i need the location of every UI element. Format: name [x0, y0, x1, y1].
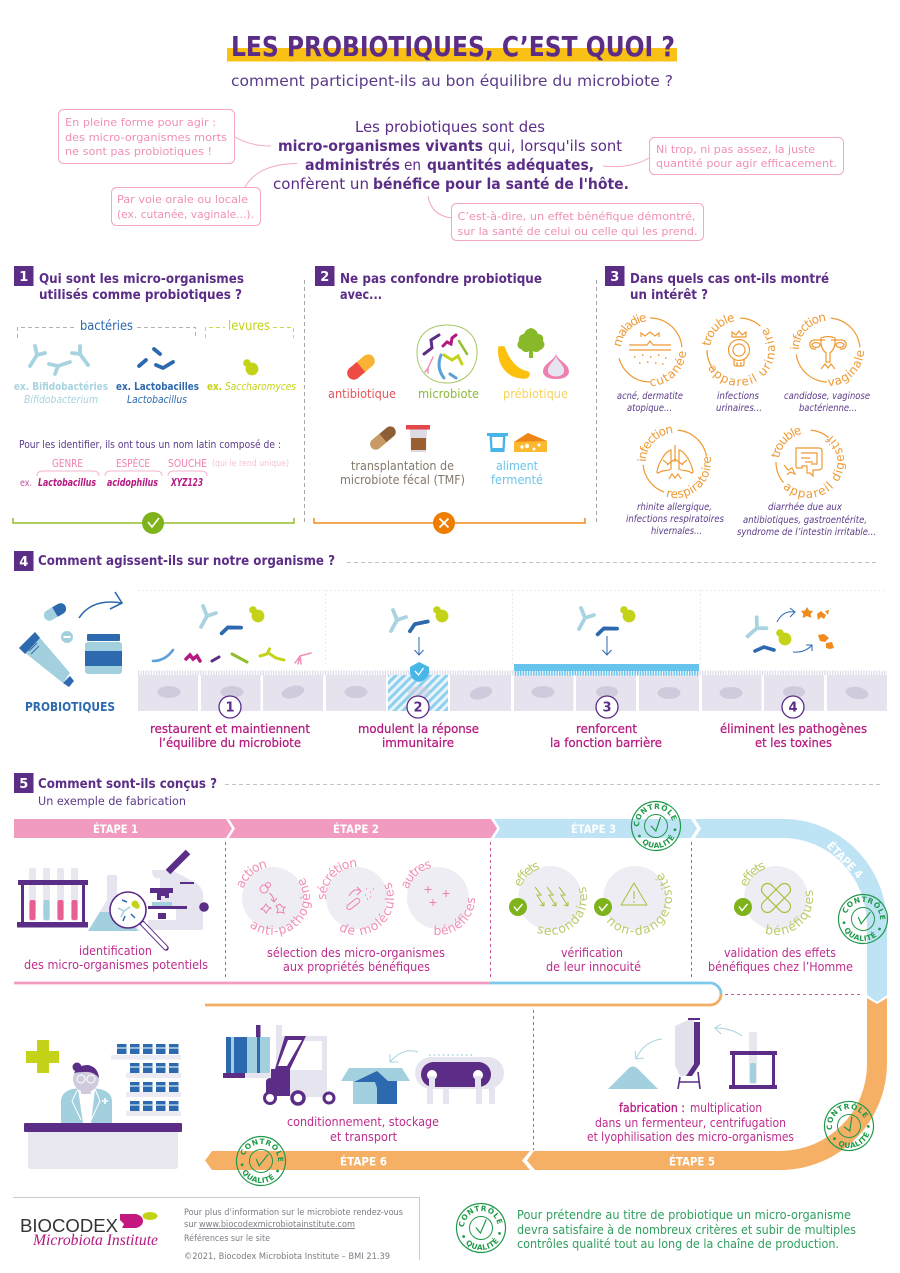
heading 4 [14, 551, 879, 571]
badge: trouble appareil digestif: appareil digestif [784, 436, 846, 500]
label: aliment fermenté: fermenté [491, 472, 543, 487]
text: nom latin: acidophilus [107, 477, 158, 489]
band: étape 2 [229, 819, 497, 838]
badge: trouble appareil urinaire: trouble [702, 314, 734, 345]
logo: Biocodex Microbiota Institute: Microbiota Institute [32, 1232, 158, 1249]
circle: effets bénéfiques: bénéfiques [766, 890, 814, 936]
text: étape 5: et lyophilisation des micro-organismes [587, 1130, 794, 1144]
icon: bifidobactéries [30, 346, 88, 374]
band: étape 6 [205, 1151, 530, 1170]
stamp: contrôle qualité étape 3 [630, 800, 682, 852]
heading 5 [14, 773, 882, 808]
text: nom latin: (qui le rend unique) [212, 459, 289, 469]
caption: infection respiratoire: hivernales... [651, 526, 702, 537]
stamp: contrôle qualité étape 6: QUALITÉ [242, 1170, 274, 1184]
caption: infection respiratoire: rhinite allergique, [637, 502, 712, 513]
illustration: pharmacie [24, 1040, 182, 1169]
action 2: réponse immunitaire [358, 606, 479, 750]
logo: Biocodex Microbiota Institute [20, 1212, 158, 1249]
badge: infection respiratoire: infection [636, 426, 672, 461]
band: étape 3: ÉTAPE 3 [571, 821, 616, 836]
heading 3: un intérêt ? [630, 287, 708, 303]
text: contrôle qualité [517, 1208, 856, 1251]
action 3: barrière [514, 606, 699, 750]
footer [13, 1197, 856, 1262]
icon: microbiote [417, 325, 477, 383]
circle: autres bénéfices [402, 861, 475, 936]
icon: levure [243, 359, 258, 375]
stamp: contrôle qualité étape 6: CONTRÔLE [240, 1138, 284, 1162]
caption: infection vaginale: bactérienne... [799, 403, 857, 414]
heading 5: Un exemple de fabrication [38, 794, 186, 808]
callout: c'est-à-dire: C’est-à-dire, un effet bénéfique démontré, [458, 210, 696, 223]
action 2: réponse immunitaire: 2 [413, 700, 423, 716]
stamp: contrôle qualité légende [456, 1202, 506, 1254]
definition text: micro-organismes vivants [278, 137, 483, 155]
text: étape 3: vérification [561, 946, 623, 960]
text: nom latin: Pour les identifier, ils ont tous un nom latin composé de : [19, 439, 281, 451]
panel 1: micro-organismes [13, 266, 296, 534]
icon: check secondaires [509, 898, 527, 916]
circle: sécrétion de molécules [318, 860, 394, 935]
circle: action anti-pathogène: anti-pathogène [250, 878, 312, 937]
callout: ni trop ni pas assez: quantité pour agir efficacement. [656, 157, 837, 170]
icon: check bénéfiques [734, 898, 752, 916]
label: probiotiques: PROBIOTIQUES [25, 700, 115, 714]
text: contrôle qualité: Pour prétendre au titre de probiotique un micro-organisme [517, 1208, 851, 1222]
stamp: contrôle qualité étape 3: CONTRÔLE [634, 804, 678, 826]
label: TMF [340, 458, 465, 487]
callout: en pleine forme: ne sont pas probiotiques ! [65, 145, 212, 158]
icon: yaourt et fromage [487, 433, 547, 452]
icon: antibiotique capsule [345, 352, 377, 382]
label: saccharomyces: Saccharomyces [225, 380, 296, 393]
band: étape 1 [14, 819, 232, 838]
text: étape 1 [24, 944, 208, 972]
action 1: microbes équilibre: l’équilibre du microbiote [159, 736, 301, 750]
band: étape 5: ÉTAPE 5 [669, 1154, 715, 1168]
caption: trouble digestif: antibiotiques, gastroentérite, [743, 515, 867, 526]
badge: infection respiratoire: respiratoire [666, 456, 711, 499]
bactéries bracket [18, 319, 196, 338]
label: saccharomyces [207, 380, 296, 393]
stamp: contrôle qualité étape 5 [824, 1100, 874, 1152]
title: LES PROBIOTIQUES, C’EST QUOI ? [231, 31, 675, 63]
action 1: microbes équilibre: 1 [225, 700, 235, 716]
text: étape 2: sélection des micro-organismes [267, 946, 445, 960]
circle: sécrétion de molécules: sécrétion [318, 860, 356, 900]
text: étape 3: de leur innocuité [546, 960, 641, 974]
label: bifidobactéries: Bifidobacterium [24, 394, 98, 406]
text: contrôle qualité: devra satisfaire à de nombreux critères et subir de multiples [517, 1223, 856, 1237]
stamp: contrôle qualité étape 4: CONTRÔLE [842, 896, 886, 920]
definition text: en [404, 156, 421, 174]
band: étape 4: ÉTAPE 4 [824, 838, 867, 881]
caption: infection vaginale: candidose, vaginose [784, 391, 870, 402]
text: étape 6 [287, 1115, 439, 1144]
footer text: Pour plus d’information sur le microbiote rendez-vous [184, 1208, 403, 1218]
circle: action anti-pathogène: action [238, 862, 266, 888]
footer text: ©2021, Biocodex Microbiota Institute – BMI 21.39 [184, 1252, 390, 1262]
definition text: administrés [305, 156, 400, 174]
green check baseline [13, 512, 294, 534]
caption: maladie cutanée: atopique... [627, 403, 672, 414]
callout: en pleine forme: En pleine forme pour agir : [65, 116, 216, 129]
heading 1: 1 [19, 270, 28, 285]
heading 4: 4 [19, 555, 28, 570]
heading 4: Comment agissent-ils sur notre organisme ? [38, 553, 335, 569]
text: étape 3 [546, 946, 641, 974]
levures bracket: levures [228, 319, 270, 334]
action 3: barrière: 3 [602, 700, 612, 716]
badge: trouble appareil urinaire: appareil urinaire [708, 328, 776, 386]
panel 4: comment agissent-ils [14, 551, 887, 750]
label: bifidobactéries: ex. Bifidobactéries [14, 380, 108, 393]
action 1: microbes équilibre: restaurent et maintiennent [150, 722, 310, 736]
callout: par voie orale: Par voie orale ou locale [117, 193, 248, 206]
badge: maladie cutanée: maladie [614, 314, 646, 346]
text: nom latin: ESPÈCE [116, 457, 150, 470]
label: bifidobactéries [14, 380, 108, 406]
illustration: machine conditionnement [415, 1055, 504, 1104]
footer text: sur [184, 1220, 197, 1230]
text: étape 4 [708, 946, 853, 974]
circle: effets bénéfiques [742, 862, 814, 936]
caption: trouble digestif: diarrhée due aux [768, 502, 842, 513]
heading 3 [605, 266, 829, 303]
stamp: contrôle qualité légende: CONTRÔLE [458, 1206, 503, 1227]
stamp: contrôle qualité légende: QUALITÉ [466, 1238, 498, 1250]
heading 1: Qui sont les micro-organismes [39, 271, 244, 287]
badge: infection vaginale: infection [790, 314, 826, 349]
definition text: Les probiotiques sont des [355, 118, 545, 136]
production loop line [14, 983, 721, 1005]
text: nom latin: SOUCHE [168, 458, 207, 470]
callout: ni trop ni pas assez [603, 138, 844, 174]
heading 1 [14, 266, 244, 303]
heading 5: Comment sont-ils conçus ? [38, 776, 217, 792]
label: saccharomyces: ex. [207, 380, 222, 393]
caption: infection respiratoire [626, 502, 724, 537]
orange cross baseline [314, 512, 585, 534]
illustration: chariot élévateur [223, 1025, 334, 1104]
subtitle: comment participent-ils au bon équilibre du microbiote ? [231, 72, 673, 90]
definition text: confèrent un [273, 175, 369, 193]
definition text: quantités adéquates, [427, 156, 594, 174]
action 4: élimination pathogènes [720, 607, 867, 750]
badge: infection vaginale [790, 314, 864, 386]
caption: infections urinaires [716, 391, 762, 414]
label: aliment fermenté [491, 458, 543, 487]
heading 1: utilisés comme probiotiques ? [39, 287, 242, 303]
text: nom latin: GENRE [52, 458, 83, 470]
logo: Biocodex Microbiota Institute: BIOCODEX [20, 1216, 118, 1236]
label: TMF: transplantation de [351, 458, 454, 473]
footer text: www.biocodexmicrobiotainstitute.com [199, 1220, 355, 1230]
heading 3: Dans quels cas ont-ils montré [630, 271, 829, 287]
text: nom latin: Lactobacillus [38, 477, 96, 489]
text: nom latin: XYZ123 [170, 477, 203, 489]
circle: effets secondaires: secondaires [537, 887, 588, 936]
illustration: tubes et microscope [17, 852, 209, 948]
icon: probiotiques produits [19, 592, 122, 687]
circle: non-dangerosité: non-dangerosité [606, 872, 672, 936]
heading 2 [315, 266, 542, 303]
panel 2: ne pas confondre [314, 266, 585, 534]
circle: autres bénéfices: autres [402, 861, 431, 888]
text: nom latin: ex. [20, 478, 32, 489]
footer text: Références sur le site [184, 1233, 270, 1244]
label: lactobacilles [116, 380, 199, 406]
band: étape 6: ÉTAPE 6 [340, 1154, 387, 1168]
callout: en pleine forme: des micro-organismes morts [65, 131, 227, 144]
callout: c'est-à-dire: sur la santé de celui ou celle qui les prend. [458, 225, 698, 238]
icon: lactobacilles [139, 349, 173, 368]
circle: sécrétion de molécules: de molécules [340, 882, 394, 935]
icon: TMF capsule and cup [368, 424, 430, 452]
text: étape 5: fabrication : [619, 1101, 685, 1115]
callout: par voie orale [112, 164, 297, 226]
action 1: microbes équilibre [150, 606, 311, 750]
circle: effets bénéfiques: effets [742, 862, 765, 886]
caption: infections urinaires: urinaires... [716, 403, 762, 414]
badge: infection respiratoire [636, 426, 711, 499]
badge: maladie cutanée [614, 314, 686, 386]
heading 3: 3 [610, 270, 619, 285]
caption: maladie cutanée [617, 391, 683, 414]
text: étape 1: des micro-organismes potentiels [24, 958, 208, 972]
action 3: barrière: renforcent [576, 722, 637, 736]
callout: en pleine forme [58, 110, 271, 164]
heading 5: 5 [19, 777, 28, 792]
footer text [184, 1208, 403, 1262]
band: étape 4 [695, 819, 887, 1002]
caption: trouble digestif [737, 502, 876, 538]
panel 3: dans quels cas [605, 266, 876, 538]
caption: maladie cutanée: acné, dermatite [617, 391, 683, 402]
heading 2: 2 [320, 270, 329, 285]
levures bracket [206, 319, 294, 338]
callout: ni trop ni pas assez: Ni trop, ni pas assez, la juste [656, 143, 815, 156]
label: microbiote: microbiote [418, 386, 479, 401]
stamp: contrôle qualité étape 3: QUALITÉ [642, 834, 675, 848]
illustration: carton [341, 1051, 418, 1104]
badge: infection vaginale: vaginale [828, 350, 864, 386]
text: étape 5: dans un fermenteur, centrifugation [595, 1116, 786, 1130]
stamp: contrôle qualité étape 4: QUALITÉ [844, 928, 876, 942]
text: contrôle qualité: contrôles qualité tout au long de la chaîne de production. [517, 1237, 839, 1251]
action 4: élimination pathogènes: 4 [788, 700, 798, 716]
intestinal cells [138, 670, 887, 711]
label: lactobacilles: ex. Lactobacilles [116, 380, 199, 393]
text: étape 6: conditionnement, stockage [287, 1115, 439, 1129]
stamp: contrôle qualité étape 5: CONTRÔLE [826, 1102, 868, 1130]
text: étape 1: identification [79, 944, 152, 958]
heading 2: Ne pas confondre probiotique [340, 271, 542, 287]
panel 5: fabrication [14, 773, 888, 1186]
definition text [273, 118, 629, 193]
circle: autres bénéfices: bénéfices [434, 898, 475, 936]
band: étape 3 [494, 819, 697, 838]
band: étape 1: ÉTAPE 1 [93, 821, 138, 836]
caption: infection respiratoire: infections respiratoires [626, 514, 724, 525]
label: lactobacilles: Lactobacillus [127, 394, 187, 406]
label: antibiotique: antibiotique [328, 386, 396, 401]
icon: prébiotique foods [499, 328, 569, 379]
label: aliment fermenté: aliment [496, 458, 538, 473]
icon: check non-dangerosité [594, 898, 612, 916]
text: étape 4: bénéfiques chez l’Homme [708, 960, 853, 974]
definition text: qui, lorsqu'ils sont [488, 137, 622, 155]
caption: infections urinaires: infections [717, 391, 759, 402]
label: TMF: microbiote fécal (TMF) [340, 472, 465, 487]
text: étape 4: validation des effets [724, 946, 836, 960]
text: étape 2 [267, 946, 445, 974]
badge: maladie cutanée: cutanée [650, 352, 686, 386]
circle: effets secondaires [516, 862, 588, 936]
action 2: réponse immunitaire: immunitaire [382, 736, 454, 750]
stamp: contrôle qualité étape 6 [236, 1136, 286, 1186]
text: étape 2: aux propriétés bénéfiques [283, 960, 430, 974]
label: prébiotique: prébiotique [503, 386, 568, 401]
badge: trouble appareil digestif: trouble [771, 428, 802, 457]
action 3: barrière: la fonction barrière [550, 736, 662, 750]
callout: par voie orale: (ex. cutanée, vaginale...). [117, 208, 254, 221]
definition text: bénéfice pour la santé de l'hôte. [373, 175, 629, 193]
circle: action anti-pathogène [238, 862, 312, 937]
callout: c'est-à-dire [428, 196, 704, 240]
action 4: élimination pathogènes: éliminent les pathogènes [720, 722, 867, 736]
text: nom latin [19, 439, 289, 489]
stamp: contrôle qualité étape 5: QUALITÉ [838, 1132, 870, 1148]
action 2: réponse immunitaire: modulent la réponse [358, 722, 479, 736]
band: étape 2: ÉTAPE 2 [333, 821, 379, 836]
caption: trouble digestif: syndrome de l’intestin irritable... [737, 527, 876, 538]
action 4: élimination pathogènes: et les toxines [755, 736, 832, 750]
bactéries bracket: bactéries [80, 319, 133, 334]
heading 2: avec... [340, 287, 382, 303]
illustration: fabrication [608, 1018, 777, 1089]
text: étape 5 [587, 1101, 794, 1144]
text: étape 6: et transport [330, 1130, 397, 1144]
stamp: contrôle qualité étape 4 [838, 894, 888, 944]
text: étape 5: multiplication [690, 1101, 762, 1115]
band: étape 5 [527, 998, 887, 1170]
caption: infection vaginale [784, 391, 870, 414]
circle: effets secondaires: effets [516, 862, 539, 886]
